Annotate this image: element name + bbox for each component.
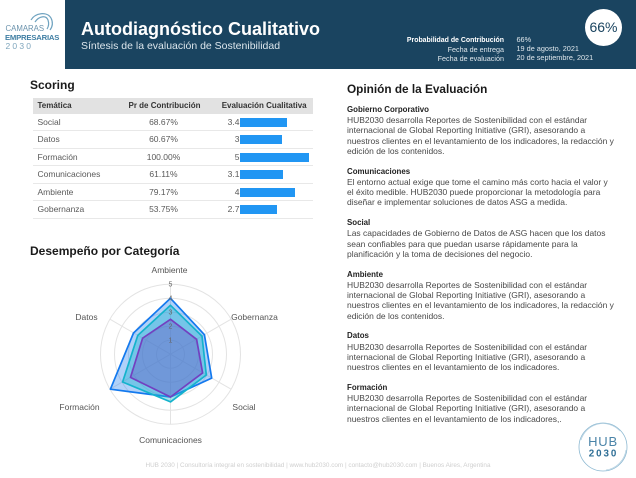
opinion: Datos: Datos xyxy=(347,331,369,340)
row: Gobernanza: 2.7 xyxy=(228,204,240,214)
table header: Pr de Contribución xyxy=(128,101,200,110)
logo: HUB 2030 xyxy=(578,422,628,472)
opinion: Comunicaciones: El entorno actual exige que tome el camino más corto hacia el valor y xyxy=(347,177,608,187)
table header xyxy=(33,98,313,114)
scale numbers: 4 xyxy=(169,296,173,303)
row: Formación: 100.00% xyxy=(147,152,180,162)
row: Gobernanza xyxy=(33,201,313,218)
score badge xyxy=(585,9,622,46)
axis labels: Gobernanza xyxy=(231,312,278,322)
opinion: Formación xyxy=(347,383,587,424)
logo arcs xyxy=(31,14,52,30)
logo: Camaras Empresarias 2030: CAMARAS xyxy=(6,24,44,32)
row: Datos xyxy=(33,131,313,148)
header band xyxy=(65,0,636,69)
meta values: 19 de agosto, 2021 xyxy=(516,44,579,52)
table header: Evaluación Cualitativa xyxy=(222,101,307,110)
row: Social xyxy=(33,114,313,131)
meta labels: Fecha de entrega xyxy=(448,44,504,54)
logo: Camaras Empresarias 2030: EMPRESARIAS xyxy=(5,32,59,42)
meta labels: Probabilidad de Contribución xyxy=(407,36,504,44)
row: Social: 3.4 xyxy=(228,116,240,126)
opinion: Comunicaciones: Comunicaciones xyxy=(347,167,410,176)
scale numbers xyxy=(169,282,173,345)
meta values: 20 de septiembre, 2021 xyxy=(516,52,593,62)
opinion: Comunicaciones xyxy=(347,167,608,207)
row: Comunicaciones: Comunicaciones xyxy=(38,169,100,179)
subtitle: Síntesis de la evaluación de Sostenibilidad xyxy=(81,40,280,52)
row: Gobernanza: 53.75% xyxy=(149,204,178,214)
opinion: Social: Las capacidades de Gobierno de Datos de ASG hacen que los datos xyxy=(347,228,605,238)
row: Ambiente: 79.17% xyxy=(149,186,178,196)
opinion: Datos: HUB2030 desarrolla Reportes de Sostenibilidad con el estándar xyxy=(347,342,587,352)
row: Datos: 60.67% xyxy=(149,134,178,144)
score badge: 66% xyxy=(589,19,618,35)
table header: Temática xyxy=(38,101,72,110)
heading: Desempeño por Categoría: Desempeño por Categoría xyxy=(30,244,179,258)
opinion: Ambiente: internacional de Global Reporting Initiative (GRI), asesorando a xyxy=(347,290,585,300)
series: purple xyxy=(130,319,203,397)
opinion: Gobierno Corporativo: HUB2030 desarrolla Reportes de Sostenibilidad con el estándar xyxy=(347,115,587,125)
axis labels xyxy=(59,265,278,445)
opinion: Comunicaciones: diseñar e implementar soluciones de datos ASG a medida. xyxy=(347,197,567,207)
scale numbers: 1 xyxy=(169,338,173,345)
row: Ambiente: Ambiente xyxy=(38,186,73,196)
row: Comunicaciones: 61.11% xyxy=(149,169,178,179)
row: Ambiente: 4 xyxy=(235,186,240,196)
logo: HUB 2030: 2030 xyxy=(589,448,618,459)
radar chart xyxy=(59,265,278,445)
scale numbers: 5 xyxy=(169,282,173,289)
row: Ambiente xyxy=(33,184,313,201)
opinion: Formación: Formación xyxy=(347,383,387,392)
axis labels: Social xyxy=(232,402,256,412)
scale numbers: 3 xyxy=(169,310,173,317)
axis labels: Formación xyxy=(59,402,100,412)
row: Datos: 3 xyxy=(235,134,240,144)
opinion: Formación: internacional de Global Reporting Initiative (GRI), asesorando a xyxy=(347,403,585,413)
row: Comunicaciones xyxy=(33,166,313,184)
opinion: Gobierno Corporativo xyxy=(347,105,614,156)
heading: Opinión de la Evaluación: Opinión de la Evaluación xyxy=(347,82,487,96)
opinion: Gobierno Corporativo: edición de los contenidos. xyxy=(347,146,444,156)
axis labels: Comunicaciones xyxy=(139,435,202,445)
meta labels xyxy=(407,36,504,62)
row: Social: 68.67% xyxy=(149,116,178,126)
row: Formación: 5 xyxy=(235,152,240,162)
meta values: 66% xyxy=(516,34,531,44)
logo: Camaras Empresarias 2030: 2030 xyxy=(6,41,33,51)
opinion: Gobierno Corporativo: nuestros clientes en el levantamiento de los indicadores, la redacción y xyxy=(347,136,614,146)
logo: HUB 2030: HUB xyxy=(588,434,618,448)
meta values xyxy=(516,34,593,62)
axis labels: Datos xyxy=(75,312,98,322)
meta labels: Fecha de evaluación xyxy=(438,54,504,62)
axis labels: Ambiente xyxy=(152,265,188,275)
series: blue xyxy=(110,298,212,397)
series: teal xyxy=(123,305,206,402)
scoring table xyxy=(33,98,313,219)
opinion: Datos: internacional de Global Reporting Initiative (GRI), asesorando a xyxy=(347,352,585,362)
opinion: Social: planificación y la toma de decisiones del negocio. xyxy=(347,249,532,259)
opinion: Gobierno Corporativo: internacional de Global Reporting Initiative (GRI), asesorando a xyxy=(347,125,585,135)
row: Datos: Datos xyxy=(38,134,60,144)
opinion: Formación: HUB2030 desarrolla Reportes de Sostenibilidad con el estándar xyxy=(347,393,587,403)
opinion: Ambiente: HUB2030 desarrolla Reportes de Sostenibilidad con el estándar xyxy=(347,280,587,290)
opinion: Social xyxy=(347,218,606,259)
opinion: Social: Social xyxy=(347,218,370,227)
row: Formación: Formación xyxy=(38,152,78,162)
opinion: Comunicaciones: el éxito medible. HUB2030 puede proporcionar la metodología para xyxy=(347,187,600,197)
scale numbers: 2 xyxy=(169,324,173,331)
logo: Camaras Empresarias 2030 xyxy=(5,13,60,51)
opinion: Social: sean confiables para que puedan usarse rápidamente para la xyxy=(347,239,578,249)
title: Autodiagnóstico Cualitativo xyxy=(81,19,320,39)
opinion: Datos xyxy=(347,331,587,372)
footer: HUB 2030 | Consultoría integral en sostenibilidad | www.hub2030.com | contacto@hub2030.com | Buenos Aires, Argentina xyxy=(145,462,490,469)
opinion: Ambiente: edición de los contenidos. xyxy=(347,311,444,321)
heading: Scoring: Scoring xyxy=(30,78,75,92)
opinion: Formación: nuestros clientes en el levantamiento de los indicadores,. xyxy=(347,414,562,424)
opinion: Ambiente xyxy=(347,270,614,321)
opinion: Ambiente: nuestros clientes en el levantamiento de los indicadores, la redacción y xyxy=(347,300,614,310)
row: Gobernanza: Gobernanza xyxy=(38,204,84,214)
row: Social: Social xyxy=(38,116,61,126)
row: Formación xyxy=(33,148,313,166)
opinion: Ambiente: Ambiente xyxy=(347,270,383,279)
opinion: Gobierno Corporativo: Gobierno Corporativo xyxy=(347,105,429,114)
row: Comunicaciones: 3.1 xyxy=(228,169,240,179)
opinion: Datos: nuestros clientes en el levantamiento de los indicadores. xyxy=(347,362,559,372)
